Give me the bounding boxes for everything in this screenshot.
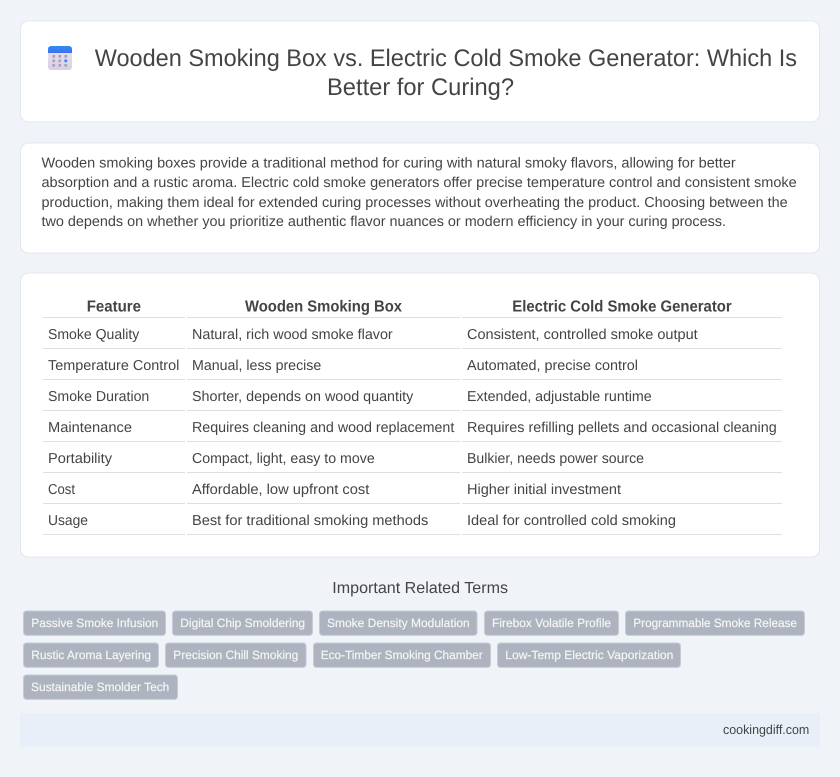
title: Wooden Smoking Box vs. Electric Cold Smoke Generator: Which Is <box>95 45 797 72</box>
table header <box>87 298 732 315</box>
summary text: production, making them ideal for extended curing processes without overheating the product. Choosing between the <box>42 195 788 211</box>
title: Better for Curing? <box>327 74 514 101</box>
table header: Electric Cold Smoke Generator <box>512 298 732 315</box>
row: smoke quality: Smoke Quality <box>48 327 140 343</box>
chip: Digital Chip Smoldering <box>172 611 312 635</box>
row: smoke duration <box>48 389 652 405</box>
chip: Rustic Aroma Layering: Rustic Aroma Layering <box>31 648 151 662</box>
row: cost: Higher initial investment <box>467 482 621 498</box>
row: maintenance: Maintenance <box>48 420 132 436</box>
chip: Eco-Timber Smoking Chamber <box>314 643 490 667</box>
summary text: absorption and a rustic aroma. Electric cold smoke generators offer precise temperature control and consistent smoke <box>42 175 797 191</box>
row: portability: Compact, light, easy to move <box>192 451 375 467</box>
summary text: Wooden smoking boxes provide a traditional method for curing with natural smoky flavors, allowing for better <box>42 155 736 171</box>
row: smoke quality <box>48 327 698 343</box>
chip: Precision Chill Smoking: Precision Chill Smoking <box>173 648 298 662</box>
row: portability: Portability <box>48 451 113 467</box>
row: usage: Best for traditional smoking methods <box>192 513 428 529</box>
chip: Passive Smoke Infusion: Passive Smoke Infusion <box>31 616 158 630</box>
chip: Rustic Aroma Layering <box>24 643 158 667</box>
footer bar: cookingdiff.com <box>723 722 809 737</box>
chip: Low-Temp Electric Vaporization: Low-Temp Electric Vaporization <box>505 648 673 662</box>
icon: calendar <box>48 46 72 70</box>
table header: Feature <box>87 298 141 315</box>
row: usage <box>48 513 676 529</box>
row: usage: Ideal for controlled cold smoking <box>467 513 676 529</box>
row: portability <box>48 451 644 467</box>
chip: Firebox Volatile Profile <box>484 611 618 635</box>
chip: Digital Chip Smoldering: Digital Chip Smoldering <box>180 616 305 630</box>
chip: Smoke Density Modulation: Smoke Density Modulation <box>327 616 470 630</box>
row: usage: Usage <box>48 513 88 529</box>
row: portability: Bulkier, needs power source <box>467 451 644 467</box>
row: maintenance <box>48 420 777 436</box>
chip: Programmable Smoke Release <box>626 611 804 635</box>
chip: Programmable Smoke Release: Programmable Smoke Release <box>633 616 797 630</box>
row: maintenance: Requires cleaning and wood replacement <box>192 420 454 436</box>
table header: Wooden Smoking Box <box>245 298 402 315</box>
related terms heading: Important Related Terms <box>332 580 508 597</box>
related terms chips <box>24 611 804 699</box>
row: cost <box>48 482 621 498</box>
panel: title header <box>20 21 820 122</box>
summary text <box>42 155 797 230</box>
chip: Sustainable Smolder Tech: Sustainable Smolder Tech <box>31 680 169 694</box>
row: smoke duration: Shorter, depends on wood quantity <box>192 389 414 405</box>
chip: Smoke Density Modulation <box>320 611 477 635</box>
panel: summary <box>20 143 820 253</box>
row: cost: Cost <box>48 482 75 498</box>
chip: Low-Temp Electric Vaporization <box>498 643 680 667</box>
row: temperature control: Temperature Control <box>48 358 179 374</box>
panel: comparison table <box>20 273 820 557</box>
row: temperature control: Manual, less precise <box>192 358 321 374</box>
row: smoke duration: Extended, adjustable runtime <box>467 389 652 405</box>
footer bar <box>20 713 820 747</box>
row: maintenance: Requires refilling pellets and occasional cleaning <box>467 420 777 436</box>
title <box>95 45 797 101</box>
chip: Passive Smoke Infusion <box>24 611 166 635</box>
row: temperature control: Automated, precise control <box>467 358 638 374</box>
row: smoke quality: Natural, rich wood smoke flavor <box>192 327 393 343</box>
row: cost: Affordable, low upfront cost <box>192 482 369 498</box>
chip: Eco-Timber Smoking Chamber: Eco-Timber Smoking Chamber <box>321 648 483 662</box>
row: smoke duration: Smoke Duration <box>48 389 149 405</box>
row: temperature control <box>48 358 638 374</box>
chip: Sustainable Smolder Tech <box>24 675 178 699</box>
chip: Firebox Volatile Profile: Firebox Volatile Profile <box>492 616 611 630</box>
row: smoke quality: Consistent, controlled smoke output <box>467 327 698 343</box>
summary text: two depends on whether you prioritize authentic flavor nuances or modern efficiency in your curing process. <box>42 214 726 230</box>
chip: Precision Chill Smoking <box>166 643 306 667</box>
